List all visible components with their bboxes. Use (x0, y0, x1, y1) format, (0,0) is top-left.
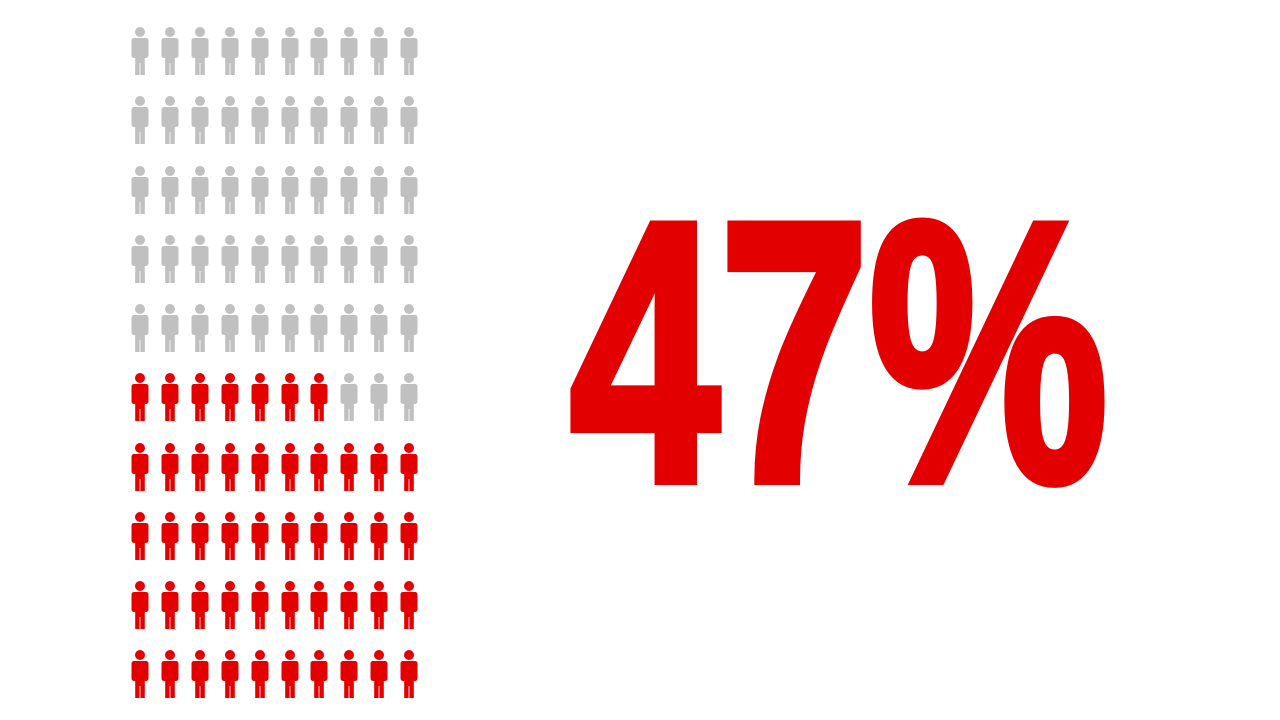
grey rows 1-5 (132, 27, 418, 421)
red icons (47) (132, 373, 418, 698)
icon grid: 100 people, 47 highlighted (132, 27, 418, 698)
